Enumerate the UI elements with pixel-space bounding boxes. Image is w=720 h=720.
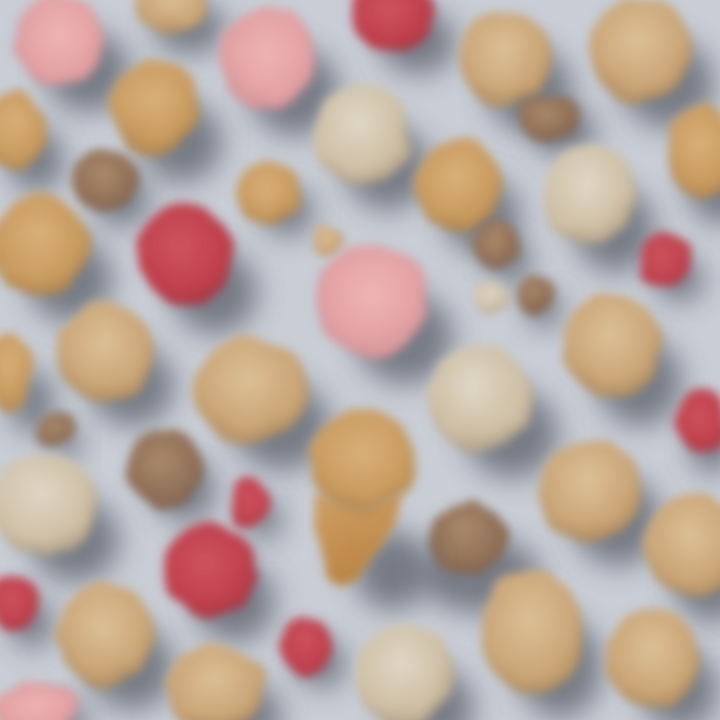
scoop: tan small centre — [237, 162, 314, 236]
scoop: tan top right — [589, 0, 714, 128]
scoop: brown lower centre — [420, 502, 540, 613]
scoop: red left centre — [137, 204, 257, 334]
scoop: cream left — [0, 454, 119, 582]
scoop: tan bottom left — [56, 584, 174, 710]
scoop: red left edge — [0, 574, 54, 648]
scoop: red right edge — [676, 390, 720, 474]
scoop: cream upper centre — [313, 84, 430, 210]
ice cream cone — [309, 411, 430, 610]
scoop: gold upper left — [110, 60, 222, 182]
scoop: tan bottom right — [606, 609, 718, 720]
scoop: brown small left — [71, 148, 150, 226]
scoop: pink centre — [316, 244, 453, 384]
scoop: small red bottom — [280, 616, 346, 688]
scoop: beige tiny centre — [312, 224, 342, 256]
scoop: tan centre left — [194, 337, 330, 470]
scoop: gold right edge — [666, 106, 720, 224]
scoop: small red lower — [230, 479, 282, 540]
scoop: red lower left — [164, 522, 275, 642]
scoop: pink top left — [14, 0, 130, 112]
scoop: tall tan bottom right — [481, 569, 602, 718]
scoop: red top — [351, 0, 456, 74]
scoop: tan top edge — [136, 0, 226, 54]
scoop: cream right — [544, 144, 655, 272]
scoop: brown tiny right — [517, 275, 563, 328]
scoop: cream centre right — [427, 345, 558, 478]
scoop: brown tiny left — [38, 412, 82, 460]
scoop: beige tiny right — [474, 282, 506, 314]
scoop: brown small centre right — [475, 220, 532, 284]
scoop: gold left — [0, 194, 112, 322]
scoop: brown lower left — [128, 429, 215, 522]
scoop: tan bottom — [166, 645, 282, 720]
scoop: gold centre — [414, 139, 520, 254]
scoop: pink upper — [219, 7, 339, 136]
scoop: pink bottom left — [0, 682, 89, 720]
scoop: tan lower right — [539, 439, 662, 566]
scoop: gold left edge lower — [0, 334, 54, 434]
scoop: tan right — [563, 292, 682, 426]
scoop: tan top — [459, 9, 572, 132]
scoop: tan left — [56, 303, 174, 426]
scoop: gold left edge — [0, 91, 64, 192]
scoop: cream bottom centre — [356, 624, 474, 720]
scoop: cream right edge lower — [645, 494, 720, 622]
scoop: red small right — [638, 233, 704, 302]
scoop: small brown top right — [518, 94, 597, 156]
